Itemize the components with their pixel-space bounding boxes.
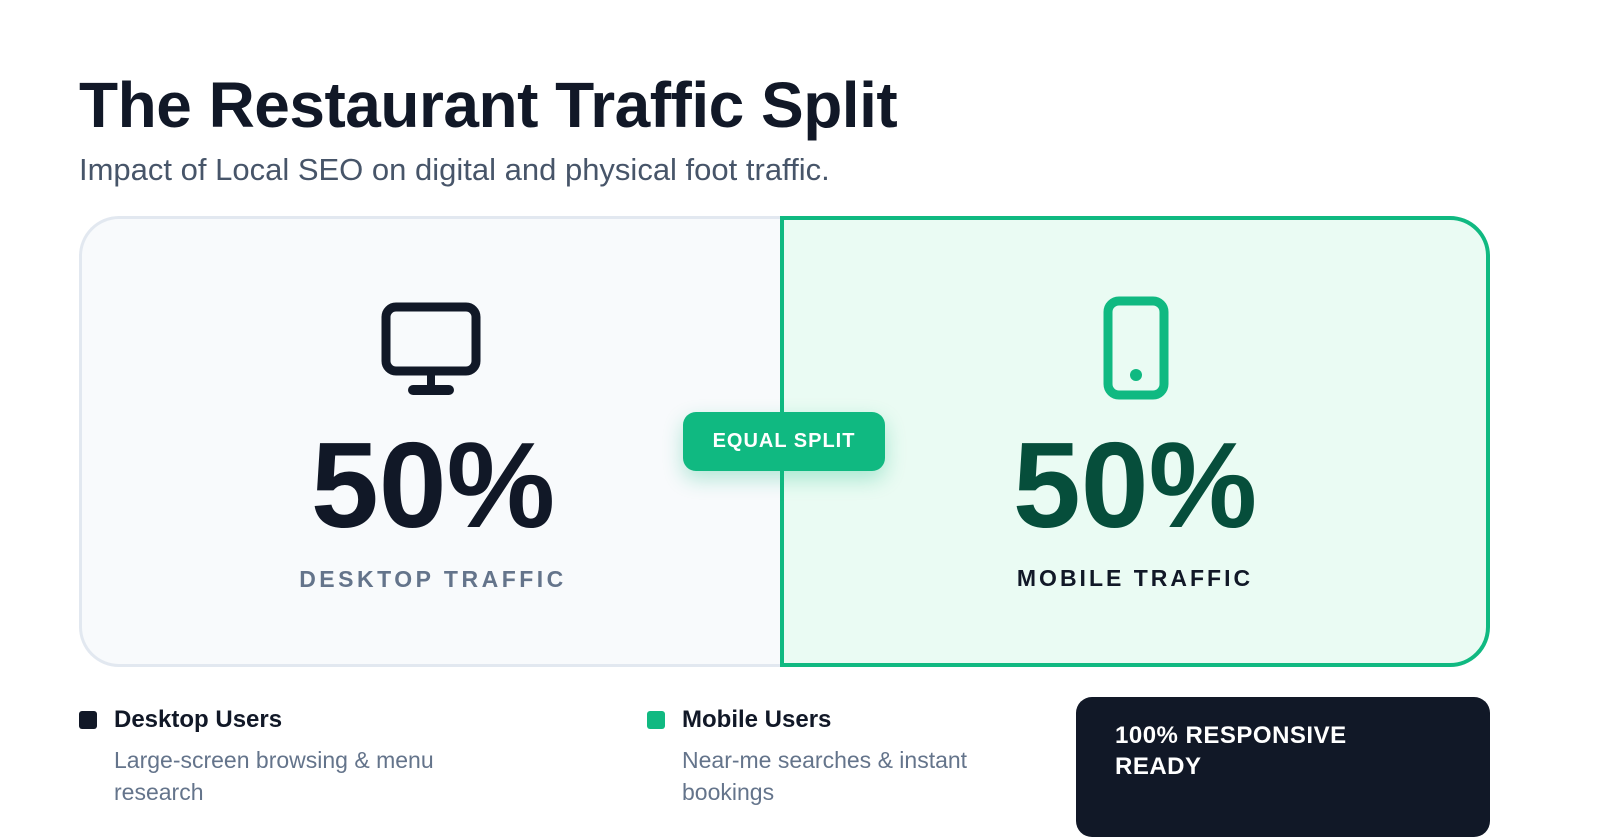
desktop label: DESKTOP TRAFFIC [299,566,567,592]
desktop percentage: 50% [311,417,555,553]
legend: mobile users: Mobile Users [682,706,831,733]
legend: mobile users: Near-me searches & instant bookings [682,747,967,805]
legend: mobile users [647,706,967,805]
badge: equal split [683,412,885,471]
callout: responsive ready [1076,697,1490,837]
legend: desktop users: Desktop Users [114,706,282,733]
panel: split card [79,216,1490,667]
icon: monitor [382,302,480,395]
badge: equal split: EQUAL SPLIT [713,430,855,452]
icon: phone [1104,296,1168,400]
title: The Restaurant Traffic Split [79,69,897,141]
panel: mobile [780,216,1490,667]
mobile percentage: 50% [1013,417,1257,553]
legend: desktop users [79,706,434,805]
legend: desktop users: Large-screen browsing & menu research [114,747,434,805]
subtitle: Impact of Local SEO on digital and physical foot traffic. [79,152,830,187]
panel: desktop [79,216,784,667]
mobile label: MOBILE TRAFFIC [1017,565,1253,591]
callout: responsive ready: 100% RESPONSIVE READY [1115,722,1347,780]
